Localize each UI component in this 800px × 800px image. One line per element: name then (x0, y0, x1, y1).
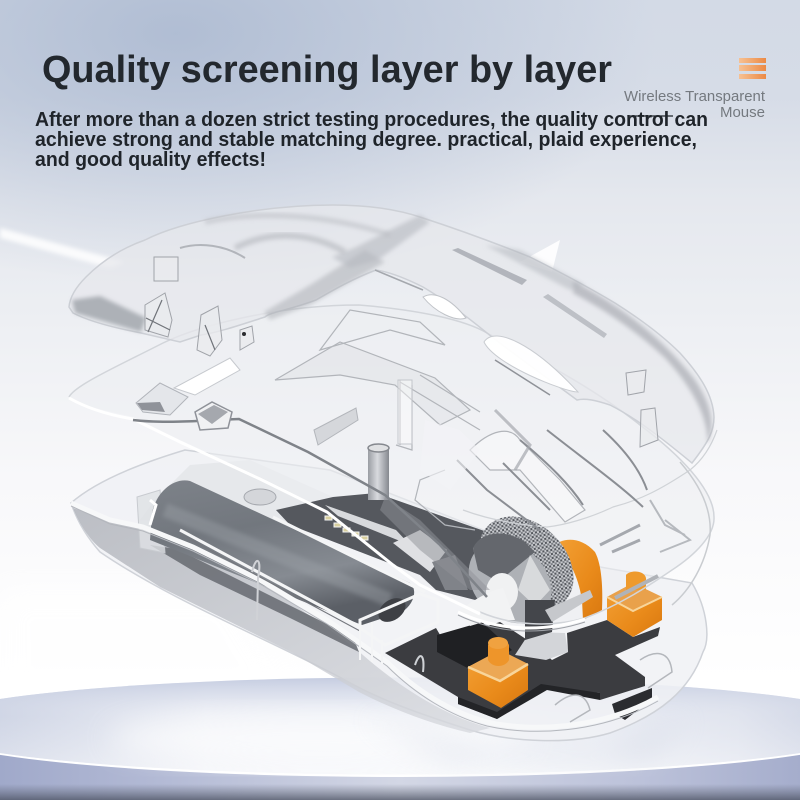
frosted diagonal band (264, 250, 385, 320)
scroll wheel (452, 498, 602, 640)
buttons and clips (136, 358, 358, 445)
lower circuit board (385, 620, 660, 719)
switch: back right (607, 572, 662, 637)
product label (624, 88, 766, 121)
title: Quality screening layer by layer (42, 49, 612, 91)
mouse shadow on platform (360, 715, 690, 762)
left frosted smear (72, 296, 146, 332)
right edge shading (573, 281, 712, 445)
metal rod (368, 444, 389, 500)
inner post (398, 380, 412, 444)
contact pins (325, 505, 410, 545)
description (35, 109, 708, 171)
rim (69, 398, 480, 614)
translucent gray band (380, 497, 490, 590)
description: and good quality effects! (35, 149, 266, 171)
bottom shell (71, 450, 707, 741)
middle shell lines (69, 305, 717, 631)
platform (0, 677, 800, 800)
top arcs (235, 236, 345, 252)
icon: orange menu (739, 58, 766, 79)
metal slider (393, 530, 468, 590)
description: achieve strong and stable matching degree. practical, plaid experience, (35, 129, 697, 151)
battery (150, 480, 414, 627)
lower gray shell body (73, 508, 490, 733)
battery holder (150, 500, 438, 672)
description: After more than a dozen strict testing procedures, the quality control can (35, 109, 708, 131)
inner ribs (275, 310, 717, 530)
switch: front (468, 637, 528, 708)
middle shell fill (69, 305, 714, 624)
product label: Mouse (720, 104, 765, 121)
product label: Wireless Transparent (624, 88, 766, 105)
exploded mouse (69, 205, 717, 741)
slots (452, 248, 527, 285)
upper circuit board (276, 493, 490, 603)
lower right shell tail (555, 654, 672, 722)
outline (69, 305, 714, 624)
clips (145, 257, 658, 447)
board details (437, 622, 512, 672)
thick rails (457, 430, 710, 605)
top shell (69, 205, 714, 463)
chassis rim (71, 503, 658, 731)
